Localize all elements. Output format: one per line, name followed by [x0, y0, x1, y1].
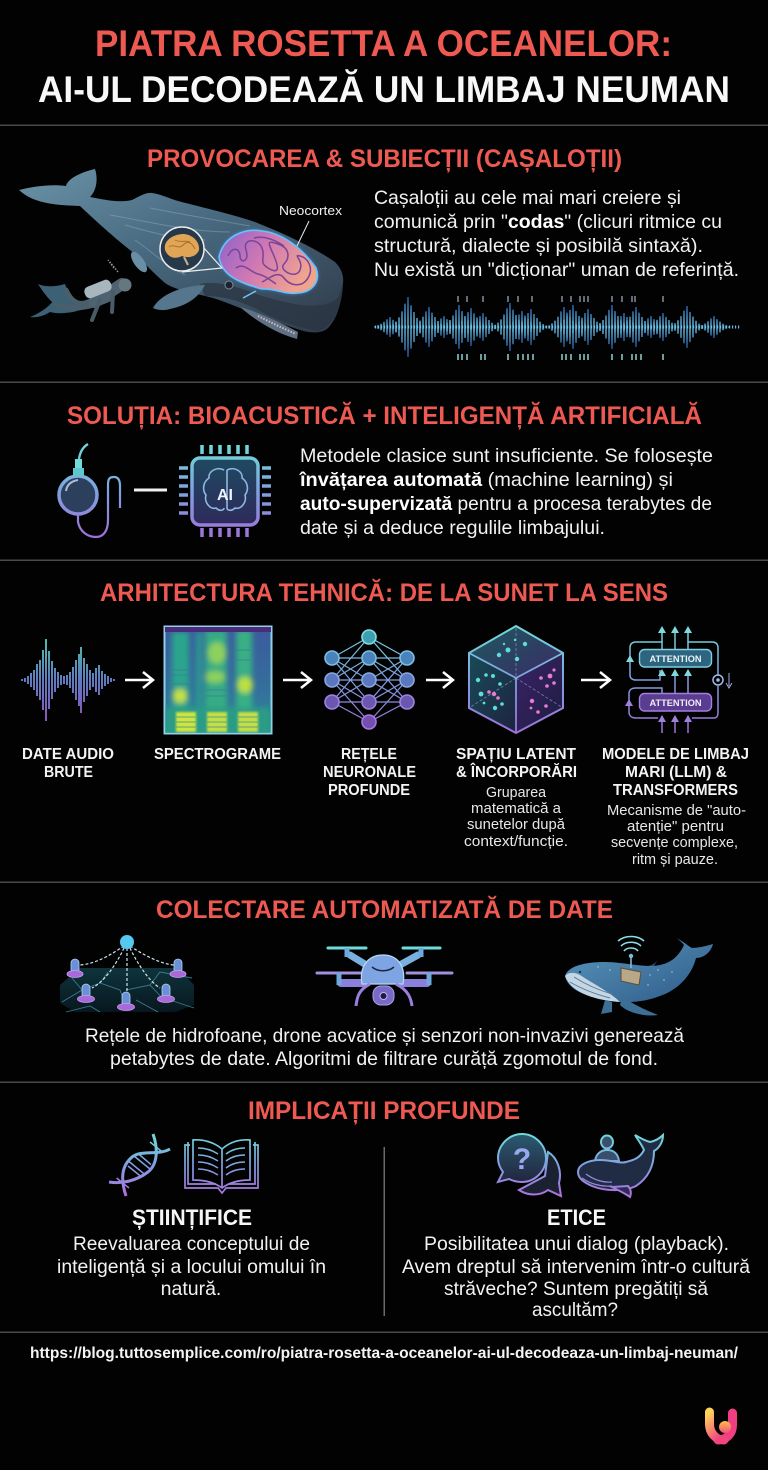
- body text: data collection: petabytes de date. Algoritmi de filtrare curăță zgomotul de fond.: [110, 1048, 658, 1070]
- text: latent space: & ÎNCORPORĂRI: [456, 763, 577, 781]
- body text: machine learning: date și a deduce regulile limbajului.: [300, 517, 605, 539]
- column: ethical implications: Posibilitatea unui dialog (playback).: [424, 1233, 729, 1255]
- panel: technical architecture: [22, 578, 749, 868]
- column: ethical implications: [402, 1205, 750, 1321]
- lower jaw: [240, 307, 298, 339]
- text: language models: TRANSFORMERS: [613, 782, 738, 799]
- icon: hydrophone: [59, 444, 120, 537]
- body text: data collection: [85, 1025, 684, 1070]
- text: language models: secvențe complexe,: [611, 834, 738, 851]
- label: neocortex: Neocortex: [279, 204, 343, 218]
- column: scientific implications: [57, 1205, 326, 1300]
- column: scientific implications: ȘTIINȚIFICE: [132, 1205, 252, 1230]
- icon: latent space cube: [469, 626, 563, 733]
- labels: raw audio data: DATE AUDIO: [22, 746, 114, 763]
- text: language models: [602, 746, 749, 868]
- arrow: [125, 672, 153, 688]
- panel: challenge and subjects: [19, 145, 740, 360]
- text: latent space: sunetelor după: [467, 816, 566, 833]
- heading: challenge: PROVOCAREA & SUBIECȚII (CAȘALOȚII): [147, 145, 622, 173]
- text: language models: Mecanisme de "auto-: [607, 802, 746, 819]
- labels: deep neural networks: [323, 746, 416, 799]
- label: spectrograms: SPECTROGRAME: [154, 746, 281, 763]
- column: scientific implications: Reevaluarea conceptului de: [73, 1233, 310, 1255]
- body text: codas: Cașaloții au cele mai mari creiere și: [374, 187, 681, 209]
- title: AI-UL DECODEAZĂ UN LIMBAJ NEUMAN: [38, 69, 730, 110]
- heading: solution: SOLUȚIA: BIOACUSTICĂ + INTELIGENȚĂ ARTIFICIALĂ: [67, 401, 702, 430]
- body text: codas: structură, dialecte și posibilă sintaxă).: [374, 235, 703, 257]
- panel: solution: [59, 401, 713, 539]
- text: language models: MARI (LLM) &: [625, 764, 727, 781]
- icon: tagged whale: [565, 936, 713, 1016]
- body text: machine learning: [299, 445, 713, 539]
- heading: data collection: COLECTARE AUTOMATIZATĂ DE DATE: [156, 895, 613, 924]
- labels: deep neural networks: PROFUNDE: [328, 782, 410, 799]
- arrow: [581, 672, 610, 688]
- logo: [710, 1412, 732, 1440]
- body text: data collection: Rețele de hidrofoane, drone acvatice și senzori non-invazivi generează: [85, 1025, 684, 1047]
- labels: deep neural networks: REȚELE: [341, 746, 397, 763]
- arrow: [426, 672, 453, 688]
- icon: person on whale: [578, 1135, 663, 1197]
- column: scientific implications: natură.: [161, 1278, 221, 1300]
- icon: AI chip: [179, 445, 271, 537]
- text: language models: atenție" pentru: [627, 818, 724, 835]
- heading: implications: IMPLICAȚII PROFUNDE: [248, 1097, 520, 1125]
- chart: spectrogram: [164, 626, 272, 734]
- flipper: [153, 285, 205, 310]
- column: ethical implications: ETICE: [547, 1205, 606, 1230]
- attention block: upper: ATTENTION: [650, 654, 702, 664]
- illustration: sperm whale with brain: [19, 169, 343, 339]
- text: latent space: context/funcție.: [464, 833, 568, 850]
- icon: question bubbles: [498, 1134, 561, 1196]
- illustration: diver: [30, 260, 132, 320]
- source URL: https://blog.tuttosemplice.com/ro/piatra-rosetta-a-oceanelor-ai-ul-decodeaza-un-limbaj-neuman/: [30, 1345, 739, 1362]
- column: ethical implications: străveche? Suntem pregătiți să: [444, 1278, 708, 1300]
- text: latent space: [456, 746, 577, 850]
- panel: deep implications: [57, 1097, 750, 1321]
- text: language models: ritm și pauze.: [632, 851, 718, 868]
- body text: machine learning: auto-supervizată pentru a procesa terabytes de: [300, 493, 712, 515]
- text: language models: MODELE DE LIMBAJ: [602, 746, 749, 763]
- icon: DNA helix: [109, 1134, 170, 1196]
- icon: question bubbles: ?: [513, 1143, 531, 1176]
- heading: architecture: ARHITECTURA TEHNICĂ: DE LA SUNET LA SENS: [100, 578, 668, 607]
- labels: raw audio data: BRUTE: [44, 764, 93, 781]
- attention block: lower: ATTENTION: [650, 698, 702, 708]
- icon: raw audio waveform: [22, 639, 114, 721]
- icon: AI chip: AI: [217, 487, 233, 504]
- body text: codas: comunică prin "codas" (clicuri ritmice cu: [374, 211, 722, 233]
- title: PIATRA ROSETTA A OCEANELOR:: [95, 23, 672, 64]
- body text: codas: [374, 187, 739, 281]
- text: latent space: Gruparea: [486, 784, 547, 801]
- column: ethical implications: ascultăm?: [532, 1299, 618, 1321]
- neocortex brain: [219, 230, 317, 293]
- text: latent space: SPAȚIU LATENT: [456, 746, 577, 763]
- chart: coda waveform: [375, 296, 740, 360]
- body text: codas: Nu există un "dicționar" uman de referință.: [374, 259, 739, 281]
- text: latent space: matematică a: [471, 800, 562, 817]
- connector line: [134, 488, 167, 492]
- title: [38, 23, 730, 110]
- column: scientific implications: inteligență și a locului omului în: [57, 1256, 326, 1278]
- column: ethical implications: Avem dreptul să intervenim într-o cultură: [402, 1256, 750, 1278]
- labels: raw audio data: [22, 746, 114, 781]
- labels: deep neural networks: NEURONALE: [323, 764, 416, 781]
- icon: open book: [185, 1140, 258, 1193]
- label: neocortex: [279, 204, 343, 246]
- icon: hydrophone network: [60, 935, 194, 1012]
- icon: attention transformer diagram: [625, 626, 732, 733]
- zoom circle: small brain: [160, 227, 222, 272]
- body text: machine learning: învățarea automată (machine learning) și: [299, 469, 673, 491]
- icon: deep neural network: [325, 630, 414, 729]
- body text: machine learning: Metodele clasice sunt insuficiente. Se folosește: [300, 445, 713, 467]
- arrow: [283, 672, 311, 688]
- icon: aquatic drone: [317, 948, 452, 1006]
- center divider: [384, 1147, 385, 1316]
- panel: automated data collection: [60, 895, 713, 1070]
